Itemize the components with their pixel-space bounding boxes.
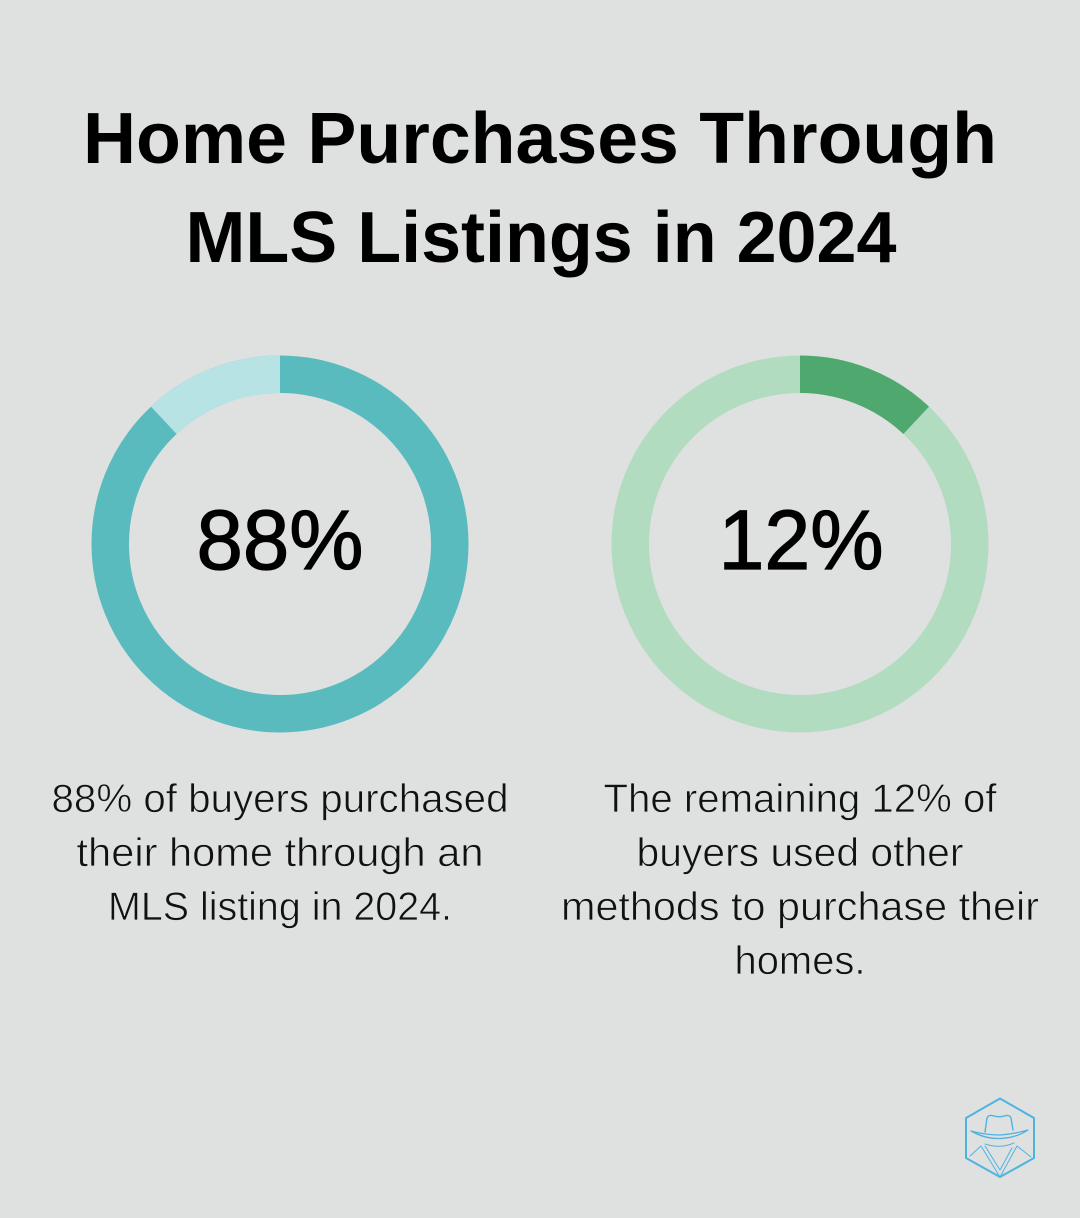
description: 12%: methods to purchase their [561, 885, 1039, 929]
title [83, 99, 997, 278]
value: 12%: 12% [718, 493, 884, 587]
description: 88%: 88% of buyers purchased [52, 777, 508, 821]
description: 88%: MLS listing in 2024. [108, 885, 452, 929]
title: Home Purchases Through [83, 99, 997, 179]
panel: 88% MLS listing [52, 374, 508, 929]
description: 88%: their home through an [76, 831, 484, 875]
title: MLS Listings in 2024 [186, 198, 896, 278]
value: 88%: 88% [196, 493, 364, 587]
description: 12% [561, 777, 1039, 983]
description: 12%: The remaining 12% of [604, 777, 997, 821]
description: 12%: homes. [734, 939, 866, 983]
icon: hexagon logo with hat [966, 1098, 1034, 1177]
panel: 12% other methods [561, 374, 1039, 983]
donut chart: 88% [110, 374, 450, 714]
description: 12%: buyers used other [636, 831, 964, 875]
description: 88% [52, 777, 508, 929]
donut chart: 12% [630, 374, 970, 714]
